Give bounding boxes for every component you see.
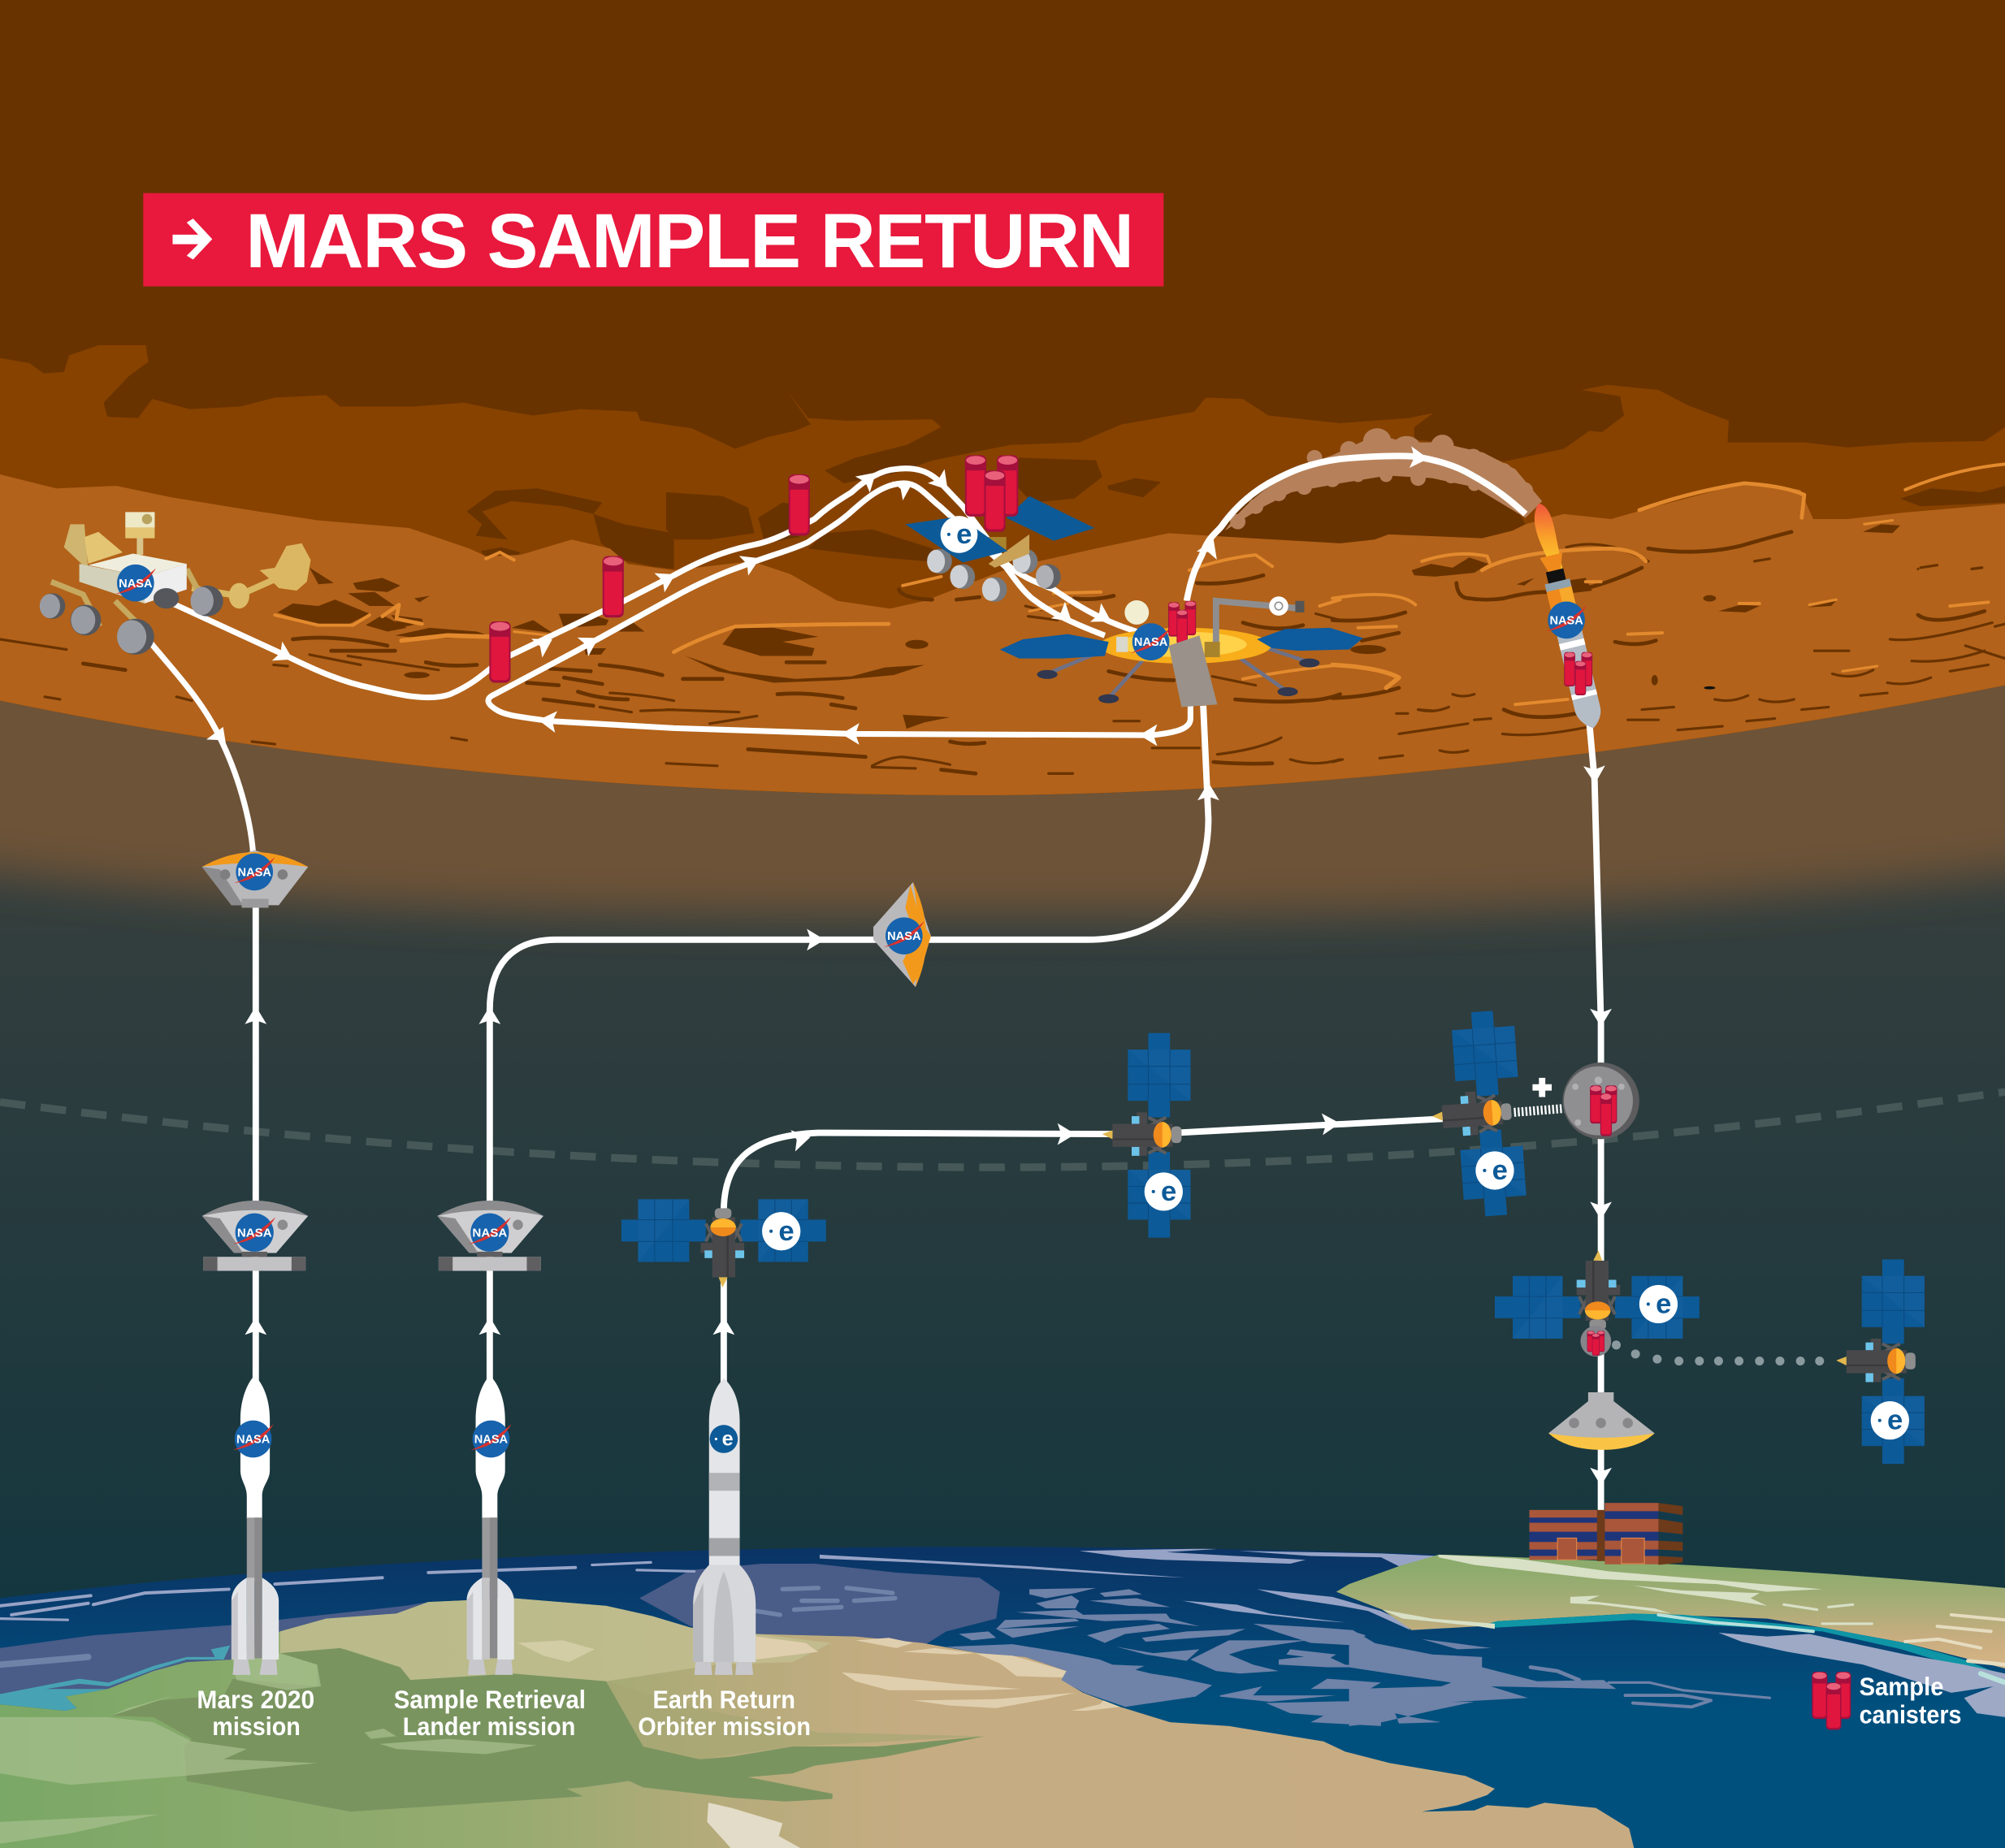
sample retrieval lander bbox=[1000, 596, 1363, 707]
label: Sample Retrieval Lander mission: Sample Retrieval bbox=[394, 1686, 586, 1714]
terrain: orange plain bbox=[0, 474, 2005, 818]
ESA logo: e bbox=[1656, 1288, 1671, 1319]
Earth: right continent bbox=[1336, 1555, 2005, 1668]
NASA logo on rover: NASA bbox=[119, 578, 153, 591]
flight path: Mars 2020 launch to landing bbox=[151, 643, 256, 1394]
aeroshell: Sample Retrieval Lander cruise bbox=[873, 882, 931, 987]
Mars ascent vehicle bbox=[1535, 504, 1604, 731]
terrain: dark craters and blobs bbox=[278, 524, 1900, 729]
sample container capture: spring bbox=[1514, 1109, 1564, 1112]
flight path: fetch rover return loop bbox=[488, 483, 1190, 735]
arrowheads bbox=[206, 446, 1612, 1486]
Earth Return Orbiter at launch bbox=[621, 1199, 826, 1288]
ascent ramp bbox=[1169, 635, 1217, 707]
sample tubes on rocket bbox=[1564, 652, 1592, 695]
fetch rover solar panels bbox=[1007, 496, 1094, 541]
Mars 2020 rover bbox=[40, 512, 310, 655]
curation building bbox=[1529, 1503, 1682, 1565]
NASA logo on lander aeroshell: NASA bbox=[887, 930, 921, 943]
terrain: thin ridge lines bbox=[0, 544, 2005, 773]
fetch rover body bbox=[989, 534, 1029, 568]
legend: sample canisters bbox=[1812, 1672, 1961, 1730]
lander legs bbox=[1047, 646, 1310, 698]
flight path: ascent arc bbox=[1187, 456, 1526, 601]
orbiting sample container sphere bbox=[1562, 1062, 1639, 1139]
rocket nozzle bbox=[1546, 569, 1566, 583]
exhaust flame bbox=[1535, 504, 1562, 570]
Earth: teal coast left bbox=[0, 1646, 230, 1711]
NASA logo on aeroshell: NASA bbox=[238, 866, 271, 879]
plus sign bbox=[1532, 1078, 1552, 1097]
NASA logo capsule 1: NASA bbox=[237, 1226, 272, 1240]
released orbiter and dotted separation path bbox=[1612, 1259, 1925, 1464]
label: Sample Retrieval Lander mission bbox=[394, 1686, 586, 1741]
terrain: mid brown ridge bbox=[0, 345, 2005, 818]
orbit dashed line bbox=[0, 1092, 2005, 1167]
rover arm bbox=[192, 579, 275, 595]
title banner bbox=[143, 193, 1163, 287]
NASA logo rocket 1 bbox=[233, 1421, 274, 1457]
Earth: pale streaks right bbox=[1382, 1555, 1822, 1629]
fetch rover wheels bbox=[927, 549, 1061, 602]
NASA logo on rover bbox=[115, 565, 156, 602]
ESA logo on rocket: e bbox=[722, 1427, 734, 1450]
Earth: cream patches on land bbox=[756, 1637, 1120, 1711]
NASA logo rocket 2: NASA bbox=[474, 1434, 509, 1447]
ESA logo on rocket bbox=[710, 1425, 738, 1453]
Earth: left continent bbox=[0, 1598, 1635, 1848]
lander robot arm bbox=[1216, 601, 1301, 644]
ESA logo: e bbox=[1492, 1155, 1508, 1186]
NASA logo on rocket bbox=[1546, 602, 1587, 638]
label: Earth Return Orbiter mission: Earth Return bbox=[653, 1686, 795, 1714]
NASA logo on lander bbox=[1130, 623, 1171, 660]
ESA logo bbox=[1639, 1285, 1678, 1323]
Earth: dark green interior bbox=[111, 1648, 985, 1811]
ESA logo on rover: e bbox=[956, 519, 972, 550]
flight path: rover sample trail out bbox=[172, 469, 1137, 698]
label: Mars 2020 mission bbox=[197, 1686, 314, 1741]
Earth: pale green patches bbox=[0, 1653, 537, 1844]
rocket: Mars 2020 bbox=[232, 1376, 279, 1675]
terrain: dark blotches bbox=[466, 458, 2005, 569]
sample tube on trail 3 bbox=[789, 474, 810, 535]
lander solar panels bbox=[1000, 634, 1109, 659]
label: Earth Return Orbiter mission: Orbiter mission bbox=[638, 1712, 811, 1741]
flight path: Sample Retrieval Lander bbox=[490, 706, 1208, 1394]
rocket: Sample Retrieval Lander bbox=[467, 1376, 514, 1675]
terrain: orange highlights bbox=[275, 464, 2005, 704]
Earth Return Orbiter en route bbox=[1102, 1033, 1190, 1238]
sample fetch rover bbox=[905, 455, 1094, 602]
rover suspension bbox=[51, 569, 198, 639]
Earth: hump highlight bbox=[280, 1598, 831, 1681]
Earth Return Orbiter with entry capsule bbox=[1495, 1250, 1700, 1357]
Earth Return Orbiter capturing samples bbox=[1425, 1010, 1527, 1219]
Earth: teal coast right bbox=[1479, 1613, 1992, 1671]
Earth: olive overlap bbox=[699, 1709, 983, 1759]
ESA logo: e bbox=[1161, 1176, 1176, 1207]
ESA logo: e bbox=[778, 1216, 795, 1247]
Mars surface bbox=[0, 345, 2005, 795]
rocket: Earth Return Orbiter bbox=[693, 1378, 756, 1675]
label: Earth Return Orbiter mission bbox=[638, 1686, 811, 1741]
ESA logo on rover bbox=[941, 516, 977, 553]
label: Mars 2020 mission: mission bbox=[212, 1712, 301, 1741]
rover body bbox=[89, 554, 187, 577]
legend: sample canisters: canisters bbox=[1860, 1701, 1961, 1729]
NASA logo on rocket: NASA bbox=[1549, 614, 1583, 627]
ESA logo bbox=[1475, 1151, 1514, 1190]
label: Mars 2020 mission: Mars 2020 bbox=[197, 1686, 314, 1714]
flight path: sample return to Earth bbox=[1589, 724, 1601, 1515]
ESA logo: e bbox=[1887, 1405, 1903, 1436]
terrain: thick ridge lines bbox=[83, 532, 1985, 773]
rover rear panels bbox=[64, 524, 89, 570]
flight path: Earth Return Orbiter outbound bbox=[724, 1119, 1445, 1394]
ESA logo bbox=[1145, 1172, 1183, 1211]
smoke trail of ascent vehicle bbox=[1225, 428, 1542, 530]
ESA logo bbox=[762, 1212, 800, 1250]
Earth entry capsule bbox=[1548, 1392, 1655, 1450]
Mars atmosphere haze bbox=[0, 383, 2005, 915]
rocket upper stage bbox=[1545, 580, 1577, 613]
trio of sample tubes on rover bbox=[965, 455, 1018, 532]
Earth: cloud streaks bbox=[820, 1548, 1439, 1630]
background: deep space gradient bbox=[0, 818, 2005, 1637]
terrain: mid patch under fetch rover bbox=[755, 552, 1023, 608]
NASA logo rocket 2 bbox=[470, 1421, 512, 1457]
Earth bbox=[0, 1541, 2005, 1848]
rover camera mast bbox=[136, 537, 143, 555]
sample sphere on orbiter bbox=[1580, 1326, 1611, 1357]
NASA logo rocket 1: NASA bbox=[236, 1434, 271, 1447]
title text: MARS SAMPLE RETURN bbox=[245, 199, 1134, 284]
NASA logo on lander: NASA bbox=[1134, 636, 1168, 649]
lander deck bbox=[1100, 628, 1271, 664]
cruise capsule 2 bbox=[437, 1201, 543, 1271]
NASA logo capsule 2: NASA bbox=[472, 1226, 507, 1240]
Earth: ocean cloud islands bbox=[946, 1588, 1617, 1726]
Earth: shallow zones bbox=[0, 1564, 1000, 1704]
cruise capsule 1 bbox=[202, 1201, 308, 1271]
ESA logo bbox=[1871, 1401, 1909, 1439]
Earth: coastal cloud bbox=[1718, 1633, 2005, 1717]
legend: sample canisters: Sample bbox=[1860, 1673, 1943, 1701]
aeroshell: entry above Mars 2020 path bbox=[202, 850, 308, 908]
icon: title arrow bbox=[172, 219, 212, 260]
sample tubes on lander bbox=[1168, 601, 1196, 644]
rover wheels bbox=[40, 586, 223, 655]
rocket body bbox=[1557, 627, 1604, 731]
label: Sample Retrieval Lander mission: Lander mission bbox=[403, 1712, 575, 1741]
sample tube on trail 1 bbox=[489, 621, 510, 682]
sample tube on trail 2 bbox=[603, 556, 624, 617]
lander dish bbox=[1124, 600, 1149, 625]
